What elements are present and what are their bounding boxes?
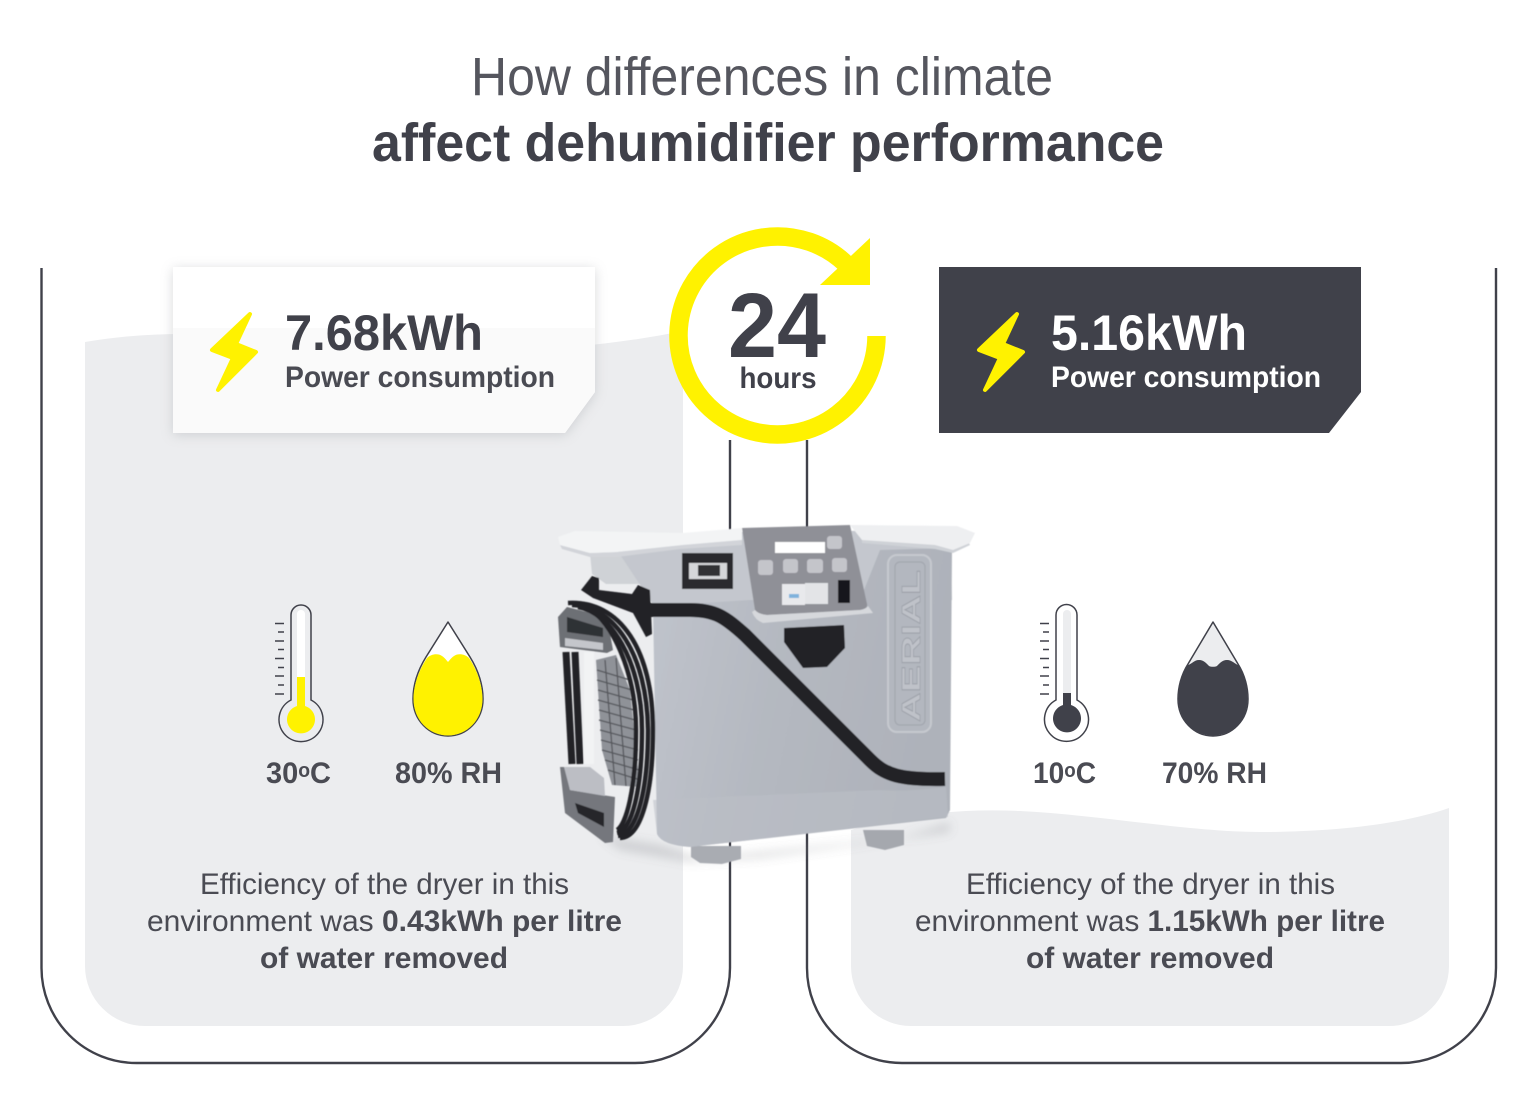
right efficiency text xyxy=(915,868,1385,975)
right temperature label: 10 xyxy=(1033,757,1066,790)
24: 24 xyxy=(728,275,826,377)
drop fill xyxy=(1178,660,1248,736)
left power value: 7.68kWh xyxy=(285,305,483,361)
embossed logo frame xyxy=(888,555,931,732)
circular arrow xyxy=(679,236,876,434)
left efficiency text xyxy=(147,868,622,975)
title: affect dehumidifier performance xyxy=(372,113,1164,173)
panel: left climate xyxy=(42,268,730,1063)
right lid underside xyxy=(862,538,970,553)
left panel background xyxy=(85,331,683,1026)
label inner display xyxy=(698,565,720,576)
main body xyxy=(653,548,952,847)
left power label: Power consumption xyxy=(285,361,555,394)
left lid xyxy=(558,528,742,553)
thermometer outline xyxy=(1044,604,1088,741)
left temperature label: o xyxy=(298,760,310,782)
panel rim xyxy=(752,606,873,623)
right efficiency text: environment was 1.15kWh per litre xyxy=(915,905,1385,938)
left panel outline xyxy=(42,268,730,1063)
left card shadow xyxy=(173,269,595,435)
black hatch plate xyxy=(784,625,845,668)
icon: left lightning xyxy=(212,314,256,390)
black diagonal band xyxy=(645,610,945,779)
right temperature label: o xyxy=(1064,760,1076,782)
left humidity label: 80% RH xyxy=(395,757,502,790)
frame bottom slot xyxy=(575,803,604,827)
left temperature label: 30 xyxy=(266,757,299,790)
right efficiency text: Efficiency of the dryer in this xyxy=(966,868,1335,901)
left temperature label: C xyxy=(310,757,331,790)
24 hours cycle icon xyxy=(670,228,886,444)
thermometer tube xyxy=(297,610,305,677)
icon: left water drop xyxy=(413,622,483,736)
panel: right climate xyxy=(807,268,1496,1063)
scale ticks xyxy=(275,624,284,694)
thermometer fluid xyxy=(287,677,315,733)
icon: right water drop xyxy=(1178,622,1248,736)
embossed logo text: AERIAL xyxy=(896,570,926,722)
power switch xyxy=(838,580,850,603)
callout: left power xyxy=(173,267,595,435)
icon: left thermometer xyxy=(275,605,323,742)
arrow head xyxy=(820,238,870,285)
right card xyxy=(939,267,1361,433)
hours: hours xyxy=(740,362,816,395)
left efficiency text: Efficiency of the dryer in this xyxy=(200,868,569,901)
base band xyxy=(653,787,948,847)
left card lower tint xyxy=(173,328,595,433)
cord bundle xyxy=(568,603,653,838)
clip xyxy=(581,576,652,637)
drop fill xyxy=(414,654,482,736)
callout: right power xyxy=(939,267,1361,433)
right panel background xyxy=(851,808,1449,1026)
scale ticks xyxy=(1040,624,1049,694)
icon: right thermometer xyxy=(1040,604,1088,741)
drop outline xyxy=(1178,622,1248,736)
fan grille xyxy=(596,655,640,787)
thermometer tube xyxy=(1063,610,1071,693)
right efficiency text: of water removed xyxy=(1026,942,1274,975)
icon: right lightning xyxy=(979,314,1023,390)
dehumidifier product xyxy=(558,525,975,864)
back handle bracket xyxy=(590,553,650,584)
frame bottom xyxy=(560,767,615,843)
right humidity label: 70% RH xyxy=(1162,757,1267,790)
vertical inner cords xyxy=(566,652,580,764)
control panel xyxy=(742,525,867,615)
left efficiency text: environment was 0.43kWh per litre xyxy=(147,905,622,938)
right panel outline xyxy=(807,268,1496,1063)
thermometer outline xyxy=(279,605,323,742)
frame top xyxy=(558,607,613,653)
product label xyxy=(682,553,733,589)
white ring backing xyxy=(670,228,886,444)
right temperature label: C xyxy=(1076,757,1096,790)
frame top slot xyxy=(567,617,603,637)
left efficiency text: of water removed xyxy=(260,942,508,975)
embossed logo inner frame xyxy=(895,562,925,725)
left lid underside xyxy=(560,540,742,557)
frame bottom light bar xyxy=(564,767,605,796)
upper body xyxy=(617,530,952,606)
panel buttons xyxy=(758,536,847,575)
title xyxy=(372,47,1164,173)
feet xyxy=(691,846,741,864)
frame top light bar xyxy=(565,638,603,650)
label screen xyxy=(689,563,727,579)
blue water mark xyxy=(789,594,799,598)
panel labels xyxy=(782,584,805,605)
right power value: 5.16kWh xyxy=(1051,305,1247,361)
thermometer fluid xyxy=(1053,693,1081,732)
left card xyxy=(173,267,595,433)
right power label: Power consumption xyxy=(1051,361,1321,394)
display xyxy=(775,542,825,553)
right lid xyxy=(850,525,975,550)
title: How differences in climate xyxy=(471,47,1053,107)
grille mesh xyxy=(597,658,640,786)
drop outline xyxy=(413,622,483,736)
device shadow xyxy=(600,822,950,862)
gap behind grille xyxy=(584,652,594,764)
